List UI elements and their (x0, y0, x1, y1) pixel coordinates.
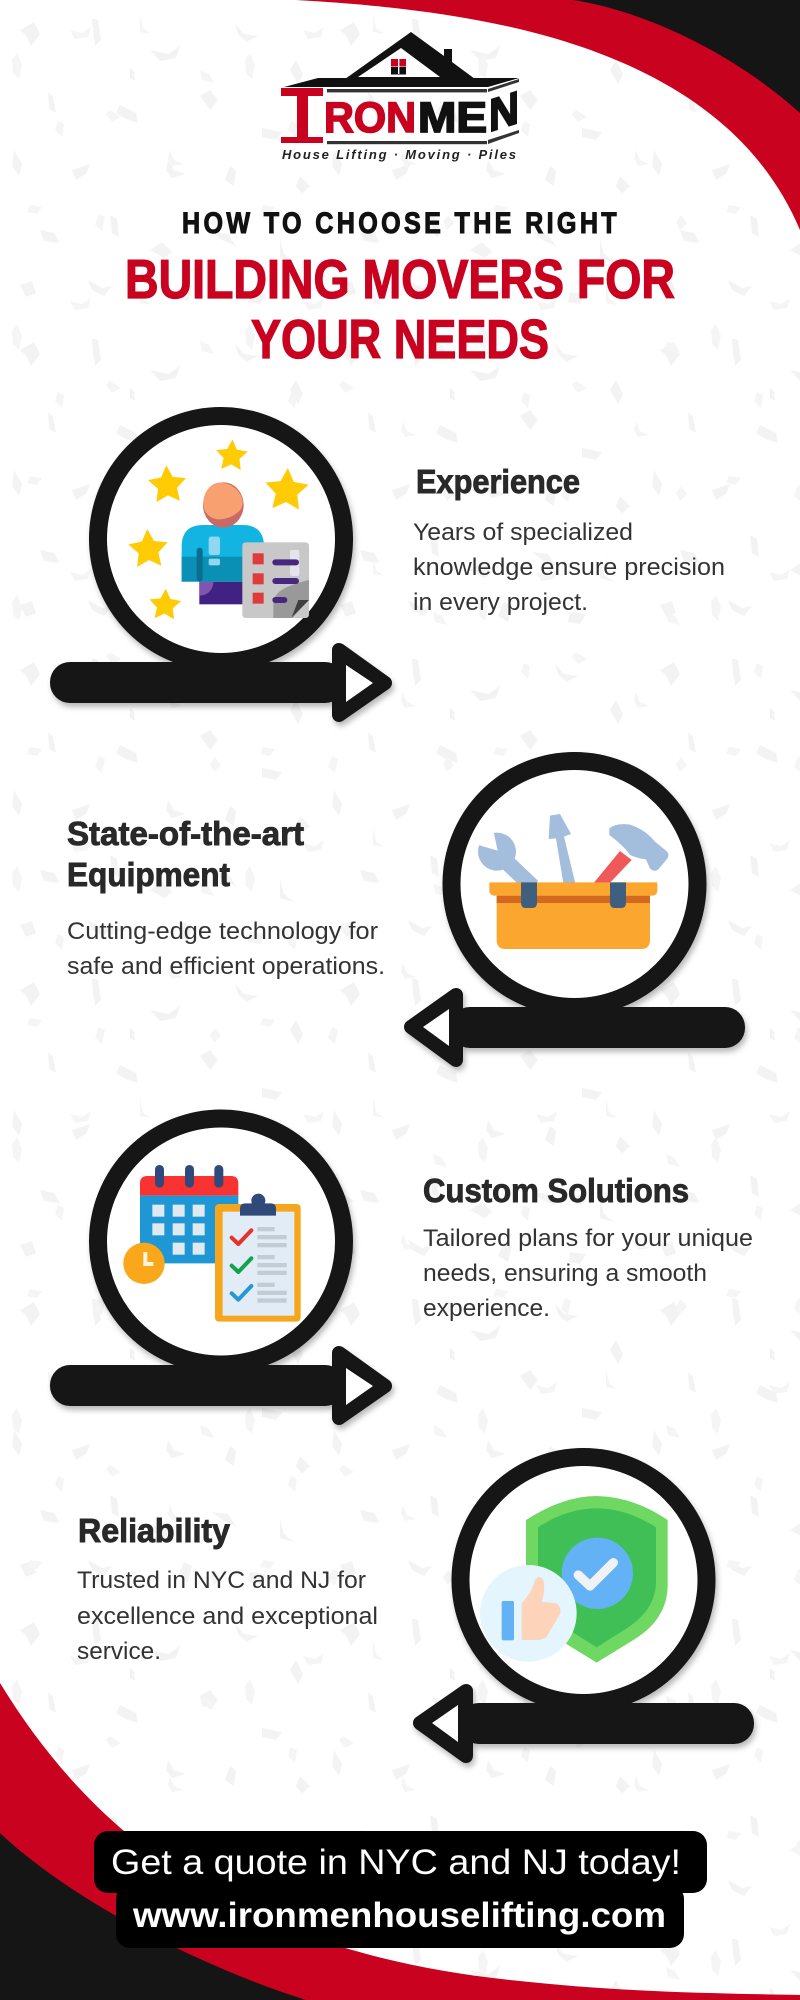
step 4 text (77, 1512, 378, 1665)
logo wordmark skewed N: N (489, 80, 519, 142)
banner line 1: Get a quote in NYC and NJ today! (111, 1843, 681, 1882)
step 3 body: needs, ensuring a smooth (423, 1260, 707, 1287)
logo wordmark black: ME (418, 94, 487, 142)
icon: shield and thumbs up (480, 1496, 668, 1663)
clock (123, 1243, 165, 1284)
banner background (94, 1831, 707, 1948)
logo roof (284, 32, 519, 144)
step 3 body (423, 1225, 753, 1322)
step 1 ring and arrow (50, 416, 385, 715)
step 3 text (423, 1172, 753, 1322)
thumbs up (480, 1565, 577, 1662)
banner line 2: website: www.ironmenhouselifting.com (132, 1896, 666, 1935)
shield (526, 1496, 668, 1663)
step 1 body: Years of specialized (413, 519, 633, 546)
hammer (593, 824, 669, 883)
toolbox body (489, 882, 657, 949)
step 4 ring and arrow (420, 1457, 754, 1756)
step 2 heading (67, 815, 304, 893)
bottom left corner swoosh (0, 1683, 800, 2000)
title line 3: YOUR NEEDS (251, 308, 549, 370)
step 4 body: service. (77, 1638, 161, 1665)
top right corner swoosh (296, 0, 800, 230)
title line 2: BUILDING MOVERS FOR (125, 248, 675, 310)
step 3 body: experience. (423, 1295, 550, 1322)
step 2 heading: State-of-the-art (67, 815, 304, 852)
step 1 body: knowledge ensure precision (413, 554, 725, 581)
step 4 body (77, 1567, 378, 1665)
title line 1: HOW TO CHOOSE THE RIGHT (182, 207, 620, 240)
stars (128, 439, 309, 620)
step 2 ring and arrow (411, 761, 745, 1060)
logo I-beam letter (281, 88, 323, 143)
step 4 body: Trusted in NYC and NJ for (77, 1567, 366, 1594)
step 2 heading: Equipment (67, 856, 230, 893)
screwdriver (549, 814, 575, 883)
step 1 heading: Experience (416, 463, 580, 500)
logo wordmark: RON (324, 94, 416, 142)
step 4 body: excellence and exceptional (77, 1603, 378, 1630)
clipboard (215, 1194, 301, 1322)
check badge (562, 1538, 633, 1609)
step 1 body (413, 519, 725, 616)
icon: toolbox (475, 814, 669, 949)
title (125, 207, 675, 370)
step 2 body (67, 918, 385, 980)
calendar (140, 1165, 238, 1263)
step 1 text (413, 463, 725, 616)
step 2 body: Cutting-edge technology for (67, 918, 378, 945)
icon: person with stars and checklist (128, 439, 309, 620)
step 3 body: Tailored plans for your unique (423, 1225, 753, 1252)
step 4 heading: Reliability (78, 1512, 231, 1549)
step 3 ring and arrow (50, 1118, 385, 1418)
step 2 body: safe and efficient operations. (67, 953, 385, 980)
step 1 body: in every project. (413, 589, 588, 616)
step 2 text (67, 815, 385, 980)
checklist (242, 542, 309, 618)
person (182, 482, 264, 604)
icon: calendar and clipboard (123, 1165, 301, 1322)
step 3 heading: Custom Solutions (423, 1172, 689, 1209)
logo tagline: House Lifting · Moving · Piles (282, 147, 516, 162)
logo: Ironmen (281, 32, 519, 162)
wrench (475, 831, 533, 887)
call to action banner (94, 1831, 707, 1948)
